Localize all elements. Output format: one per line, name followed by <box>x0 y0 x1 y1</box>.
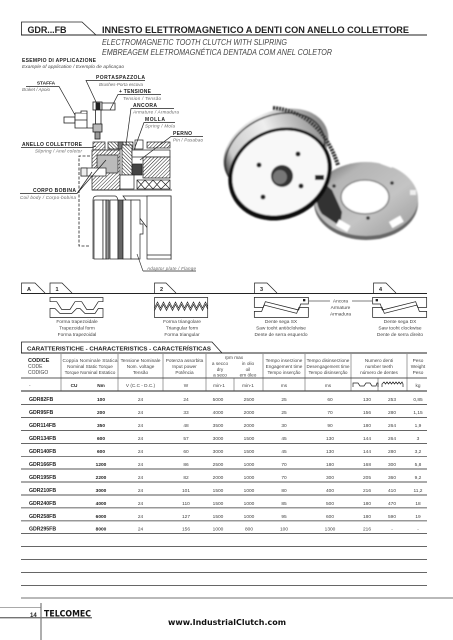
row GDR134FB: GDR134FB <box>29 436 56 442</box>
row GDR140FB: 60 <box>183 449 189 455</box>
row GDR82FB: 60 <box>327 397 333 403</box>
row GDR95FB: 200 <box>97 410 105 416</box>
row GDR95FB: 156 <box>363 410 371 416</box>
row GDR295FB: GDR295FB <box>29 526 56 532</box>
armature callout: Ancora <box>333 298 348 304</box>
row GDR82FB: 130 <box>363 397 371 403</box>
row GDR82FB: 0,85 <box>413 397 423 403</box>
row GDR134FB: 57 <box>183 436 189 442</box>
label: CORPO BOBINA: CORPO BOBINA <box>33 188 76 194</box>
row GDR140FB: 144 <box>363 449 371 455</box>
armature plate <box>314 158 418 240</box>
row GDR210FB <box>29 488 423 494</box>
table header: Torque Nominal Estatico <box>65 370 116 375</box>
row GDR82FB: GDR82FB <box>29 397 53 403</box>
row GDR82FB: 5000 <box>213 397 224 403</box>
header tab: GDR...FB: GDR...FB <box>28 25 67 35</box>
row GDR166FB: 24 <box>138 462 143 468</box>
row GDR240FB: 1000 <box>244 501 255 507</box>
table header: número de dentes <box>360 370 399 375</box>
header tab: GDR...FB <box>22 22 96 35</box>
profile captions: Dente de serra esquerdo <box>254 332 308 338</box>
table units row: V (C.C - D.C.) <box>126 383 156 388</box>
tab 4: 4 <box>379 287 383 293</box>
row GDR195FB: 82 <box>183 475 189 481</box>
table header: Tempo inserção <box>267 370 301 375</box>
row GDR195FB: 70 <box>281 475 287 481</box>
row GDR114FB: 90 <box>327 423 333 429</box>
label: ANELLO COLLETTORE: ANELLO COLLETTORE <box>22 142 83 148</box>
table header: a seco <box>213 372 227 378</box>
label: PORTASPAZZOLA <box>86 75 145 104</box>
row GDR258FB: GDR258FB <box>29 514 56 520</box>
row GDR195FB: 9,2 <box>415 475 422 481</box>
row GDR114FB: 30 <box>281 423 287 429</box>
row GDR210FB: 3000 <box>96 488 107 494</box>
row GDR82FB: 253 <box>388 397 396 403</box>
tab 2: 2 <box>160 287 163 293</box>
row GDR134FB: 600 <box>97 436 105 442</box>
row GDR95FB: GDR95FB <box>29 410 53 416</box>
profile captions: Saw tooht antiòclolwise <box>256 326 306 332</box>
row GDR210FB: 24 <box>138 488 143 494</box>
logo: TELCOMEC: TELCOMEC <box>44 610 91 620</box>
subtitle: ELECTROMAGNETIC TOOTH CLUTCH WITH SLIPRING <box>102 38 287 47</box>
row GDR166FB: 2500 <box>213 462 224 468</box>
label: PORTASPAZZOLA: PORTASPAZZOLA <box>96 75 145 81</box>
tooth profile 1: trapezoidal <box>50 298 103 318</box>
row GDR195FB: 205 <box>363 475 371 481</box>
label: MOLLA: MOLLA <box>145 117 165 123</box>
row GDR240FB <box>29 501 421 507</box>
row GDR258FB: 1500 <box>213 514 224 520</box>
row GDR166FB <box>29 462 422 468</box>
row GDR166FB: 70 <box>281 462 287 468</box>
profile captions: Forma trapezoidale <box>56 319 98 325</box>
subtitle <box>102 38 332 57</box>
row GDR258FB: 24 <box>138 514 143 520</box>
label: PERNO: PERNO <box>173 131 192 137</box>
table header: CODIGO <box>28 370 48 376</box>
row GDR240FB: 85 <box>281 501 287 507</box>
row GDR240FB: 4000 <box>96 501 107 507</box>
rotor section <box>81 140 170 190</box>
application example heading: Example of application / Exemplo de aplicaçao <box>22 64 124 70</box>
row GDR240FB: 18 <box>415 501 421 507</box>
row GDR210FB: 410 <box>388 488 396 494</box>
table header: rpm max <box>225 355 244 360</box>
application example heading: ESEMPIO DI APPLICAZIONE <box>22 58 97 64</box>
table header: Potenza assorbita <box>166 358 204 363</box>
row GDR210FB: 11,2 <box>414 488 423 494</box>
row GDR140FB: 280 <box>388 449 396 455</box>
label: ANCORA: ANCORA <box>133 103 157 109</box>
table header: em óleo <box>240 372 257 378</box>
row GDR258FB: 6000 <box>96 514 107 520</box>
table header: a secco <box>212 361 228 366</box>
label: PERNO <box>140 131 203 160</box>
row GDR134FB: 264 <box>388 436 396 442</box>
row GDR258FB: 590 <box>388 514 396 520</box>
table units row: CU <box>71 383 78 388</box>
row GDR114FB: GDR114FB <box>29 423 56 429</box>
row GDR114FB: 1,9 <box>415 423 422 429</box>
page number: 14 <box>30 613 37 619</box>
subtitle: EMBREAGEM ELETROMAGNÉTICA DENTADA COM ANEL COLETOR <box>102 48 332 57</box>
table header: Coppia Nominale Statica <box>62 358 118 363</box>
table header: Tempo disinserção <box>308 370 348 375</box>
row GDR258FB: 19 <box>415 514 421 520</box>
profile captions: Trapezoidal form <box>59 326 95 332</box>
row GDR166FB: GDR166FB <box>29 462 56 468</box>
row GDR295FB: 100 <box>280 526 288 532</box>
row GDR295FB: 8000 <box>96 526 107 532</box>
table header: Nom. voltage <box>127 364 155 369</box>
profile captions: Triangular form <box>166 326 198 332</box>
label: CORPO BOBINA: Coil body / Corpo-bobina <box>20 195 76 200</box>
row GDR195FB <box>29 475 422 481</box>
row GDR258FB <box>29 514 421 520</box>
row GDR166FB: 5,8 <box>415 462 422 468</box>
table units row: kg <box>416 383 421 388</box>
label: STAFFA: STAFFA <box>37 80 56 86</box>
tab 4 <box>374 283 396 293</box>
tab A: A <box>27 287 31 293</box>
photo: clutch and armature plate <box>210 92 418 240</box>
icon: trapezoid tooth <box>353 383 378 387</box>
row GDR134FB: 45 <box>281 436 287 442</box>
label: ANELLO COLLETTORE: Slipring / Anel coletor <box>35 148 82 154</box>
table header: Tensione Nominale <box>121 358 161 363</box>
row GDR95FB: 70 <box>327 410 333 416</box>
row GDR140FB: 45 <box>281 449 287 455</box>
section drawing of clutch <box>64 102 172 271</box>
row GDR95FB: 4000 <box>213 410 224 416</box>
row GDR95FB: 280 <box>388 410 396 416</box>
row GDR166FB: 1000 <box>244 462 255 468</box>
row GDR95FB: 1,15 <box>413 410 423 416</box>
row GDR258FB: 1000 <box>244 514 255 520</box>
row GDR210FB: 1000 <box>244 488 255 494</box>
armature callout: Armadura <box>330 312 351 318</box>
application example heading <box>22 58 124 70</box>
outer body <box>92 190 172 259</box>
row GDR82FB: 24 <box>138 397 143 403</box>
tooth profile 4: saw tooth clockwise <box>373 297 427 317</box>
row GDR134FB: 24 <box>138 436 143 442</box>
row GDR195FB: GDR195FB <box>29 475 56 481</box>
row GDR134FB: 3000 <box>213 436 224 442</box>
row GDR82FB: 100 <box>97 397 105 403</box>
row GDR114FB: 48 <box>183 423 189 429</box>
table header: in olio <box>242 361 255 366</box>
label: + TENSIONE <box>110 89 161 110</box>
row GDR166FB: 168 <box>363 462 371 468</box>
table units row <box>29 382 421 388</box>
row GDR95FB: 25 <box>281 410 287 416</box>
row GDR295FB: 800 <box>245 526 253 532</box>
row GDR210FB: 400 <box>326 488 334 494</box>
row GDR140FB: 3000 <box>213 449 224 455</box>
row GDR240FB: 180 <box>363 501 371 507</box>
tab A <box>22 283 45 293</box>
table header: oil <box>246 367 250 372</box>
table header: Input power <box>172 364 197 369</box>
row GDR295FB: 216 <box>363 526 371 532</box>
website: www.IndustrialClutch.com <box>168 618 286 627</box>
row GDR134FB: 3 <box>417 436 420 442</box>
row GDR295FB: - <box>417 528 419 532</box>
table units row: ms <box>325 383 332 388</box>
row GDR82FB <box>29 397 423 403</box>
characteristics tab: CARATTERISTICHE - CHARACTERISTICS - CARACTERÍSTICAS <box>27 344 211 352</box>
row GDR114FB: 3500 <box>213 423 224 429</box>
label: PERNO: Pin / Pasabao <box>173 138 203 142</box>
row GDR195FB: 300 <box>326 475 334 481</box>
label: MOLLA: Spring / Mola <box>145 124 175 128</box>
armature callout: Armature <box>331 305 351 311</box>
title: INNESTO ELETTROMAGNETICO A DENTI CON ANELLO COLLETTORE <box>102 25 409 35</box>
profile captions: Forma triangular <box>164 332 200 338</box>
row GDR166FB: 86 <box>183 462 189 468</box>
armature callout <box>309 298 372 318</box>
table header: Nominal Static Torque <box>67 364 113 369</box>
row GDR258FB: 600 <box>326 514 334 520</box>
row GDR140FB: 1500 <box>244 449 255 455</box>
row GDR134FB: 130 <box>326 436 334 442</box>
row GDR95FB <box>29 410 423 416</box>
row GDR114FB <box>29 423 422 429</box>
row GDR210FB: 1500 <box>213 488 224 494</box>
tab 2 <box>154 283 176 293</box>
row GDR210FB: 80 <box>281 488 287 494</box>
table units row: ms <box>281 383 288 388</box>
row GDR295FB: - <box>391 528 393 532</box>
row GDR82FB: 25 <box>281 397 287 403</box>
table units row: min-1 <box>242 383 254 388</box>
row GDR295FB: 1300 <box>325 526 336 532</box>
row GDR240FB: 24 <box>138 501 143 507</box>
row GDR210FB: 101 <box>182 488 190 494</box>
row GDR166FB: 180 <box>326 462 334 468</box>
row GDR82FB: 2500 <box>244 397 255 403</box>
tab 1 <box>50 283 72 293</box>
row GDR258FB: 127 <box>182 514 190 520</box>
row GDR195FB: 360 <box>388 475 396 481</box>
row GDR195FB: 24 <box>138 475 143 481</box>
bracket and brush holder <box>64 102 115 139</box>
table data rows <box>21 397 427 586</box>
tab 3: 3 <box>260 287 263 293</box>
tooth profile 2: triangular <box>154 298 208 318</box>
profile captions <box>56 319 423 338</box>
table header: number teeth <box>365 364 393 369</box>
label: + TENSIONE: + TENSIONE <box>119 89 152 95</box>
table header: CODE <box>28 364 43 370</box>
row GDR140FB: 24 <box>138 449 143 455</box>
row GDR95FB: 24 <box>138 410 143 416</box>
row GDR82FB: 24 <box>183 397 189 403</box>
label: STAFFA: Braket / Apoio <box>22 87 51 92</box>
table units row: W <box>184 383 189 388</box>
tooth profile band <box>21 283 427 294</box>
row GDR210FB: GDR210FB <box>29 488 56 494</box>
profile captions: Saw tooht clockwise <box>378 326 422 332</box>
row GDR295FB: 24 <box>138 526 143 532</box>
clutch body <box>210 92 347 237</box>
row GDR140FB: 130 <box>326 449 334 455</box>
profile captions: Forma triangolare <box>163 319 201 325</box>
table header: Desengagement time <box>306 364 350 369</box>
label: + TENSIONE: Tension / Tensão <box>123 96 161 101</box>
tooth profile 3: saw tooth anticlockwise <box>254 297 308 317</box>
table header: Numero denti <box>365 358 393 363</box>
label: Adaptor plate: Adaptor plate / Flange <box>146 266 196 271</box>
row GDR114FB: 24 <box>138 423 143 429</box>
table header: dry <box>217 367 224 372</box>
row GDR240FB: 500 <box>326 501 334 507</box>
label: CORPO BOBINA <box>20 160 106 200</box>
row GDR95FB: 2000 <box>244 410 255 416</box>
row GDR210FB: 216 <box>363 488 371 494</box>
footer <box>0 598 453 640</box>
row GDR114FB: 350 <box>97 423 105 429</box>
row GDR166FB: 300 <box>388 462 396 468</box>
row GDR114FB: 2000 <box>244 423 255 429</box>
table header: Peso <box>413 370 424 375</box>
row GDR166FB: 1200 <box>96 462 107 468</box>
row GDR140FB: 3,2 <box>415 449 422 455</box>
table units row: - <box>29 383 31 388</box>
profile captions: Forma trapezoidal <box>58 332 96 338</box>
row GDR240FB: 470 <box>388 501 396 507</box>
tab 3 <box>254 283 277 293</box>
row GDR295FB: 156 <box>182 526 190 532</box>
table header: Tensão <box>133 370 148 375</box>
table header: Tempo inserzione <box>266 358 303 363</box>
label: PORTASPAZZOLA: Brushes-Porta escova <box>99 82 143 87</box>
characteristics tab <box>22 342 222 353</box>
label: MOLLA <box>134 117 175 150</box>
table header: Potência <box>175 370 194 375</box>
row GDR240FB: 110 <box>182 501 190 507</box>
row GDR258FB: 180 <box>363 514 371 520</box>
row GDR240FB: 1500 <box>213 501 224 507</box>
label: ANCORA <box>126 103 179 145</box>
row GDR295FB: 1000 <box>213 526 224 532</box>
row GDR114FB: 180 <box>363 423 371 429</box>
table header: Peso <box>413 358 424 363</box>
table header <box>21 353 427 391</box>
row GDR195FB: 2200 <box>96 475 107 481</box>
row GDR134FB <box>29 436 420 442</box>
row GDR195FB: 1000 <box>244 475 255 481</box>
profile captions: Dente sega SX <box>265 319 298 325</box>
row GDR195FB: 2000 <box>213 475 224 481</box>
row GDR140FB <box>29 449 422 455</box>
table header: Weight <box>411 364 426 369</box>
table units row: Nm <box>97 383 105 388</box>
icon: triangular tooth <box>382 382 403 387</box>
row GDR140FB: 600 <box>97 449 105 455</box>
profile captions: Dente sega DX <box>384 319 417 325</box>
row GDR95FB: 33 <box>183 410 189 416</box>
row GDR114FB: 264 <box>388 423 396 429</box>
table header: Engagement time <box>266 364 303 369</box>
row GDR134FB: 1500 <box>244 436 255 442</box>
table header: CODICE <box>28 358 50 364</box>
row GDR258FB: 95 <box>281 514 287 520</box>
label: STAFFA <box>22 80 75 115</box>
label: ANELLO COLLETTORE <box>21 142 96 154</box>
tab 1: 1 <box>56 287 59 293</box>
profile captions: Dente de serra direito <box>377 332 423 338</box>
row GDR140FB: GDR140FB <box>29 449 56 455</box>
table header: Tempo disinserzione <box>307 358 350 363</box>
row GDR295FB <box>29 526 419 532</box>
label: ANCORA: Armature / Armadura <box>132 110 179 114</box>
row GDR134FB: 144 <box>363 436 371 442</box>
table units row: min-1 <box>213 383 225 388</box>
row GDR240FB: GDR240FB <box>29 501 56 507</box>
